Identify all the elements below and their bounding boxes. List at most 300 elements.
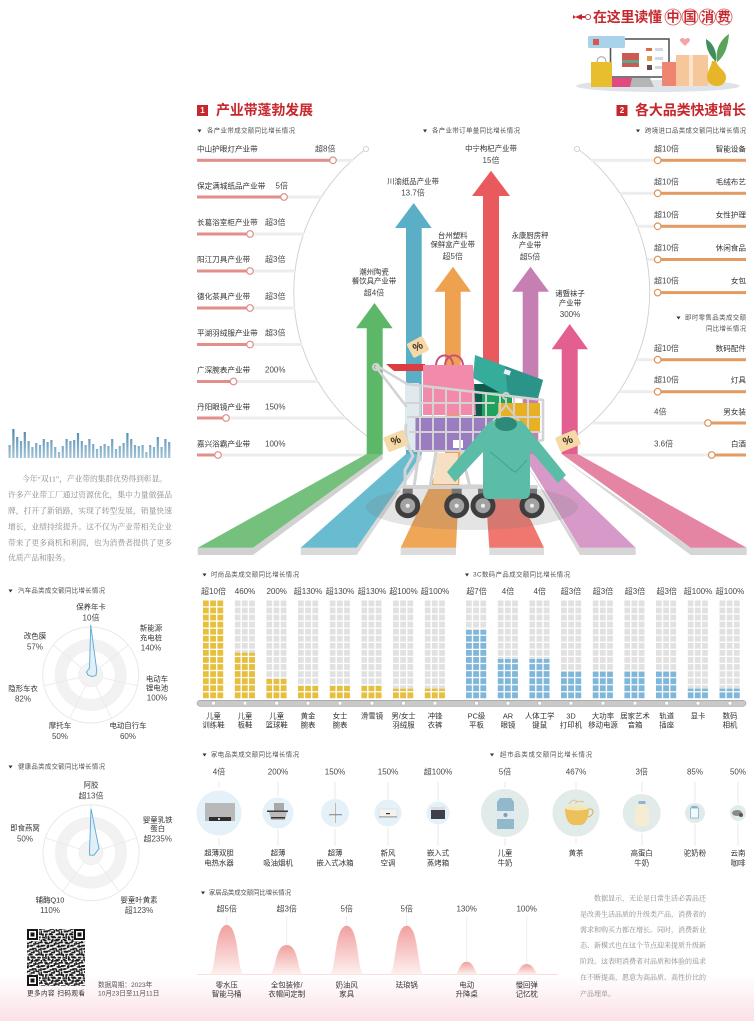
item: 驼奶粉 — [684, 768, 707, 858]
radar labels: 电动车 — [146, 674, 168, 684]
arrow: 永康厨房秤 purple: 永康厨房秤 — [512, 231, 549, 240]
row: 中山护眼灯产业带: 超8倍 — [315, 144, 335, 154]
text block: intro paragraph: 带来了更多商机和利润，也为消费者提供了更多 — [8, 538, 172, 548]
item: 云南咖啡: 咖啡 — [731, 858, 746, 868]
radar labels — [8, 602, 169, 741]
arrow: 中宁枸杞 red — [465, 144, 544, 555]
radar labels: 即食燕窝 — [10, 824, 40, 832]
item: 零水压智能马桶: 超5倍 — [216, 904, 237, 914]
wheels — [395, 489, 544, 518]
text block: intro paragraph: 牌，打开了新销路，实现了转型发展，销量快速 — [8, 506, 172, 516]
column: 大功率移动电源: 超3倍 — [593, 586, 613, 596]
row: 长葛浴室柜产业带 — [197, 217, 304, 237]
sub-heading — [8, 586, 106, 594]
item: 云南咖啡 — [730, 768, 746, 868]
column: 男/女士羽绒服: 超100% — [389, 586, 418, 596]
item: 零水压智能马桶: 智能马桶 — [212, 990, 241, 998]
sub-heading: 超市品类成交额同比增长情况 — [500, 750, 593, 758]
arrow: 川渝纸品 blue: 13.7倍 — [401, 188, 425, 198]
data period note: 10月23日至11月11日 — [98, 990, 159, 998]
row: 休闲食品: 超10倍 — [654, 242, 679, 252]
row: 阳江刀具产业带: 超3倍 — [265, 254, 285, 264]
row: 嘉兴浴霸产业带: 嘉兴浴霸产业带 — [197, 438, 251, 448]
row: 女性护理 — [637, 210, 746, 230]
row: 中山护眼灯产业带 — [197, 144, 353, 164]
row: 数码配件: 超10倍 — [654, 343, 679, 353]
column: 女士腕表: 腕表 — [333, 720, 348, 730]
title text: 消 — [701, 10, 714, 24]
row: 女包: 超10倍 — [654, 276, 679, 286]
radar labels: 婴童叶黄素 — [121, 896, 158, 904]
arrow: 川渝纸品 blue: 川渝纸品产业带 — [387, 177, 439, 186]
column: PC级平板 — [466, 586, 487, 730]
radar labels: 婴童乳铁 — [143, 816, 173, 824]
arrow: 潮州陶瓷 green: 餐饮具产业带 — [352, 276, 397, 286]
sub-heading: instant retail: 即时零售品类成交额 — [685, 312, 747, 322]
cart frame — [373, 364, 543, 487]
radar labels: 10倍 — [83, 612, 99, 622]
item: 云南咖啡: 50% — [730, 768, 746, 776]
row: 男女装: 4倍 — [654, 406, 666, 416]
column: 显卡: 超100% — [684, 586, 712, 596]
price tag: right — [555, 429, 581, 453]
item: 黄茶 — [552, 768, 600, 858]
column: 居家艺术音箱: 居家艺术 — [620, 712, 650, 720]
row: 广深腕表产业带: 广深腕表产业带 — [197, 364, 251, 374]
radar labels: 隐形车衣 — [8, 684, 38, 693]
icon: arrow to target — [573, 14, 591, 20]
sub-heading: 时尚品类成交额同比增长情况 — [211, 570, 300, 578]
column: 儿童训练鞋 — [201, 586, 226, 730]
title text — [593, 9, 732, 25]
column: 女士腕表: 超130% — [326, 586, 354, 596]
row: 休闲食品: 休闲食品 — [716, 242, 746, 252]
item: 嵌入式蒸烤箱: 嵌入式 — [427, 848, 450, 858]
item: 超薄吸油烟机: 超薄 — [271, 848, 286, 858]
item: 高蛋白牛奶: 高蛋白 — [631, 848, 653, 858]
row: 灯具: 超10倍 — [654, 374, 679, 384]
item: 嵌入式蒸烤箱: 超100% — [424, 766, 452, 776]
section heading: 2 各大品类快速增长: 2 — [620, 106, 625, 115]
arrow: 台州塑料 orange: 台州塑料 — [438, 231, 468, 240]
column: 人体工学键鼠: 人体工学 — [525, 712, 554, 720]
item: 全包装修/衣帽间定制: 衣帽间定制 — [268, 990, 305, 998]
item: 嵌入式蒸烤箱 — [424, 766, 452, 868]
goods: teal sweater on hanger — [447, 393, 566, 499]
row: 保定满城纸品产业带: 5倍 — [276, 180, 288, 190]
radar labels: 110% — [40, 906, 60, 915]
row: 平湖羽绒服产业带 — [197, 328, 302, 348]
row: 阳江刀具产业带: 阳江刀具产业带 — [197, 254, 251, 264]
text block: intro paragraph: 今年“双11”，产业带的集群优势得到彰显。 — [22, 474, 167, 484]
arc: big circle frame — [294, 146, 650, 436]
radar labels: 改色膜 — [24, 632, 47, 640]
goods: box stack — [473, 355, 543, 433]
item: 超薄嵌入式冰箱 — [317, 768, 353, 868]
column: 大功率移动电源: 移动电源 — [588, 720, 618, 730]
column: 儿童训练鞋: 超10倍 — [201, 586, 226, 596]
item: 超薄嵌入式冰箱: 嵌入式冰箱 — [317, 858, 353, 868]
bottom pink gradient band — [0, 975, 754, 1021]
radar labels: 锂电池 — [146, 684, 169, 692]
text block: closing paragraph: 阶段。这表明消费者对品质和体验的追求 — [580, 957, 706, 966]
title text: 中 — [666, 10, 680, 24]
arrow: 诸暨袜子 pink: 产业带 — [559, 298, 582, 308]
item: 珐琅锅: 5倍 — [400, 904, 413, 914]
column: 儿童板鞋: 儿童 — [238, 712, 253, 720]
item: 电动升降桌: 130% — [456, 904, 477, 914]
column: 黄金腕表: 腕表 — [301, 720, 316, 730]
column: 冲锋衣裤: 超100% — [421, 586, 449, 596]
column: 居家艺术音箱: 音箱 — [628, 720, 642, 730]
column: 数码相机: 数码 — [723, 712, 737, 720]
column: PC级平板: 平板 — [469, 720, 484, 730]
sub-heading: 家电品类成交额同比增长情况 — [211, 750, 300, 758]
title text: 国 — [683, 10, 697, 24]
section heading: 2 各大品类快速增长: 各大品类快速增长 — [635, 102, 746, 118]
column: 儿童训练鞋: 儿童 — [206, 712, 221, 720]
baseline — [197, 974, 558, 976]
sub-heading — [490, 750, 593, 758]
row: 毛绒布艺 — [620, 176, 746, 197]
sub-heading: instant retail: 同比增长情况 — [706, 324, 747, 332]
item: 电动升降桌 — [454, 904, 480, 998]
item: 新风空调: 新风 — [381, 848, 396, 858]
column: AR眼镜: 眼镜 — [501, 720, 516, 730]
row: 女包 — [654, 276, 746, 296]
radar labels: 超13倍 — [79, 790, 103, 800]
column: 大功率移动电源: 大功率 — [592, 712, 615, 720]
row: 毛绒布艺: 超10倍 — [654, 176, 679, 186]
arrow: 台州塑料 orange: 超5倍 — [442, 251, 463, 261]
text block: closing paragraph: 是改善生活品质的升级类产品，消费者的 — [580, 909, 706, 919]
row: 智能设备: 超10倍 — [654, 144, 679, 154]
text block: closing paragraph — [580, 893, 707, 998]
panel: home appliances — [196, 750, 452, 868]
item: 超薄吸油烟机: 吸油烟机 — [263, 858, 293, 868]
illustration: online shopping scene — [576, 34, 740, 92]
row: 女性护理: 女性护理 — [716, 210, 746, 220]
price tag: right: % — [561, 434, 575, 448]
row: 嘉兴浴霸产业带: 100% — [265, 440, 285, 448]
row: 阳江刀具产业带 — [197, 254, 295, 274]
radar labels: 50% — [17, 834, 33, 844]
column: PC级平板: PC级 — [468, 712, 486, 720]
radar labels: 电动自行车 — [110, 721, 146, 730]
item: 高蛋白牛奶 — [623, 766, 661, 868]
column: AR眼镜 — [498, 586, 519, 730]
column: 儿童板鞋: 460% — [235, 587, 255, 596]
row: 白酒: 白酒 — [731, 438, 746, 448]
item: 全包装修/衣帽间定制 — [268, 904, 305, 998]
radar labels: 新能源 — [140, 624, 163, 632]
panel: category growth bars — [580, 126, 747, 458]
row: 数码配件 — [637, 343, 746, 363]
text block: closing paragraph: 在不断提高，愿意为高品质、高性价比的 — [580, 973, 706, 983]
row: 男女装: 男女装 — [723, 406, 746, 416]
row: 灯具 — [620, 374, 746, 395]
column: 冲锋衣裤: 衣裤 — [428, 720, 443, 730]
item: 奶油风家具: 5倍 — [340, 904, 353, 914]
row: 数码配件: 数码配件 — [716, 343, 746, 353]
text block: intro paragraph: 优质产品和服务。 — [8, 552, 70, 562]
QR code — [26, 928, 86, 986]
section heading: 1 产业带蓬勃发展: 产业带蓬勃发展 — [216, 102, 313, 118]
item: 高蛋白牛奶: 牛奶 — [634, 858, 649, 868]
item: 零水压智能马桶: 零水压 — [216, 980, 238, 990]
item: 奶油风家具: 家具 — [339, 990, 355, 998]
sub-heading: 健康品类成交额同比增长情况 — [18, 762, 106, 770]
row: 丹阳眼镜产业带: 丹阳眼镜产业带 — [197, 402, 251, 412]
panel: 3C digital waffle chart — [465, 570, 744, 730]
column: 显卡: 显卡 — [691, 712, 705, 720]
item: 奶油风家具 — [329, 904, 365, 998]
column: 人体工学键鼠: 4倍 — [533, 586, 546, 596]
arrow: 诸暨袜子 pink — [552, 289, 747, 555]
arrow: 诸暨袜子 pink: 诸暨袜子 — [555, 289, 585, 298]
row: 德化茶具产业带: 超3倍 — [265, 291, 285, 301]
column: 轨道插座: 轨道 — [659, 712, 675, 720]
arrow: 中宁枸杞 red: 15倍 — [483, 155, 499, 165]
item: 电动升降桌: 电动 — [459, 980, 474, 990]
column: 人体工学键鼠: 键鼠 — [532, 720, 548, 730]
row: 平湖羽绒服产业带: 超3倍 — [265, 328, 285, 338]
row: 德化茶具产业带: 德化茶具产业带 — [197, 291, 251, 301]
row: 灯具: 灯具 — [731, 374, 746, 384]
title text: 在这里读懂 — [593, 9, 662, 25]
column: AR眼镜: 4倍 — [502, 586, 514, 596]
sub-heading: 各产业带订单量同比增长情况 — [432, 126, 521, 134]
radar labels: 50% — [52, 732, 68, 741]
text block: closing paragraph: 态、新模式也在这个节点迎来提质升级新 — [580, 941, 706, 950]
sub-heading: 家居品类成交额同比增长情况 — [209, 888, 292, 896]
radar labels: 保养年卡 — [76, 602, 106, 612]
item: 超薄双胆电热水器: 电热水器 — [204, 858, 234, 868]
sub-heading: 3C数码产品成交额同比增长情况 — [473, 570, 571, 578]
column: 女士腕表: 女士 — [333, 712, 348, 720]
item: 慢回弹记忆枕 — [514, 904, 540, 998]
sub-heading — [8, 762, 106, 770]
price tag: top — [406, 336, 430, 358]
item: 驼奶粉: 驼奶粉 — [684, 848, 707, 858]
item: 超薄吸油烟机: 200% — [268, 768, 288, 776]
column: 轨道插座: 插座 — [659, 720, 675, 730]
sub-heading: instant retail — [676, 312, 747, 332]
radar labels: 60% — [120, 732, 136, 741]
radar labels — [10, 780, 173, 915]
row: 长葛浴室柜产业带: 超3倍 — [265, 217, 285, 227]
column: 人体工学键鼠 — [525, 586, 554, 730]
row: 女包: 女包 — [731, 276, 746, 286]
column: 数码相机: 超100% — [716, 586, 744, 596]
radar labels: 57% — [27, 642, 43, 652]
row: 女性护理: 超10倍 — [654, 210, 679, 220]
text block: intro paragraph: 增长，业绩持续提升。这不仅为产业带相关企业 — [8, 522, 172, 532]
text block: closing paragraph: 数据显示，无论是日常生活必需品还 — [594, 893, 707, 903]
column: 3D打印机: 打印机 — [560, 720, 583, 730]
column: 大功率移动电源 — [588, 586, 618, 730]
column: 儿童篮球鞋 — [266, 587, 288, 730]
radar labels: 辅酶Q10 — [36, 896, 64, 904]
column: 3D打印机: 超3倍 — [561, 586, 581, 596]
mini bar decoration — [8, 429, 170, 458]
column: 滑雪镜 — [358, 586, 386, 720]
arrow: 潮州陶瓷 green — [198, 268, 397, 555]
item: 超薄双胆电热水器 — [196, 766, 242, 868]
row: 白酒: 3.6倍 — [654, 438, 673, 448]
item: 儿童牛奶 — [481, 766, 529, 868]
column: 黄金腕表: 黄金 — [301, 712, 316, 720]
sub-heading: cross-border: 跨境进口品类成交额同比增长情况 — [645, 126, 747, 134]
row: 保定满城纸品产业带: 保定满城纸品产业带 — [197, 180, 266, 190]
column: 男/女士羽绒服 — [389, 586, 418, 730]
row: 广深腕表产业带 — [197, 364, 318, 385]
column: 居家艺术音箱: 超3倍 — [625, 586, 645, 596]
arrow: 台州塑料 orange: 保鲜盒产业带 — [431, 240, 475, 249]
row: 中山护眼灯产业带: 中山护眼灯产业带 — [197, 144, 258, 154]
panel: industrial belt GMV growth — [197, 126, 367, 458]
row: 休闲食品 — [647, 242, 746, 263]
column: 女士腕表 — [326, 586, 354, 730]
arrow: 永康厨房秤 purple: 超5倍 — [520, 252, 540, 262]
item: 超薄双胆电热水器: 超薄双胆 — [204, 848, 234, 858]
goods: pink shopping bag — [423, 356, 476, 415]
column: 数码相机 — [716, 586, 744, 730]
column: 儿童篮球鞋: 篮球鞋 — [266, 720, 288, 730]
column: 3D打印机: 3D — [566, 712, 576, 720]
column: 滑雪镜: 超130% — [358, 586, 386, 596]
column: 滑雪镜: 滑雪镜 — [361, 712, 384, 720]
radar labels: 摩托车 — [49, 721, 71, 730]
column: 黄金腕表 — [294, 586, 322, 730]
row: 智能设备 — [591, 144, 746, 164]
row: 毛绒布艺: 毛绒布艺 — [716, 176, 746, 186]
row: 白酒 — [580, 438, 746, 458]
item: 慢回弹记忆枕: 记忆枕 — [516, 990, 538, 998]
column: 男/女士羽绒服: 男/女士 — [391, 712, 416, 720]
column: PC级平板: 超7倍 — [466, 586, 487, 596]
item: 新风空调: 空调 — [381, 858, 395, 868]
column: 黄金腕表: 超130% — [294, 586, 322, 596]
item: 驼奶粉: 85% — [687, 768, 703, 776]
column: 儿童篮球鞋: 儿童 — [269, 712, 285, 720]
row: 德化茶具产业带 — [197, 291, 295, 311]
price tag: top: % — [411, 339, 425, 355]
item: 全包装修/衣帽间定制: 全包装修/ — [271, 980, 303, 990]
column: 3D打印机 — [560, 586, 583, 730]
row: 智能设备: 智能设备 — [716, 144, 746, 154]
item: 珐琅锅: 珐琅锅 — [396, 980, 418, 990]
section heading: 1 产业带蓬勃发展: 1 — [200, 106, 205, 115]
column: 儿童板鞋: 板鞋 — [238, 720, 253, 730]
column: 冲锋衣裤: 冲锋 — [428, 712, 443, 720]
column: 轨道插座: 超3倍 — [656, 586, 677, 596]
item: 嵌入式蒸烤箱: 蒸烤箱 — [427, 858, 449, 868]
column: 冲锋衣裤 — [421, 586, 449, 730]
illustration: shopping cart with goods — [366, 336, 581, 530]
QR caption: 更多内容 扫码观看 — [27, 988, 85, 998]
radar plot — [43, 625, 139, 723]
column: 儿童板鞋 — [235, 587, 256, 730]
arrow: 永康厨房秤 purple — [512, 231, 636, 555]
item: 儿童牛奶: 儿童 — [498, 848, 513, 858]
arrow: 川渝纸品 blue — [301, 177, 439, 555]
arrow: 潮州陶瓷 green: 潮州陶瓷 — [359, 268, 389, 276]
column: 儿童篮球鞋: 200% — [266, 587, 287, 596]
radar labels: 超123% — [125, 905, 153, 915]
column: 居家艺术音箱 — [620, 586, 650, 730]
radar labels: 超235% — [143, 834, 172, 844]
item: 超薄吸油烟机 — [262, 768, 294, 868]
item: 新风空调 — [374, 768, 402, 868]
item: 奶油风家具: 奶油风 — [336, 980, 358, 990]
data period note — [98, 980, 159, 998]
main title — [573, 9, 732, 25]
panel: order-volume growth arrows — [198, 126, 747, 555]
item: 儿童牛奶: 5倍 — [499, 766, 511, 776]
panel: supermarket — [481, 750, 746, 868]
arrow: 诸暨袜子 pink: 300% — [560, 310, 580, 319]
sub-heading: 各产业带成交额同比增长情况 — [207, 126, 296, 134]
item: 儿童牛奶: 牛奶 — [498, 858, 512, 868]
item: 超薄嵌入式冰箱: 150% — [325, 768, 345, 776]
item: 慢回弹记忆枕: 慢回弹 — [516, 980, 538, 990]
row: 广深腕表产业带: 200% — [265, 366, 285, 374]
item: 珐琅锅 — [389, 904, 425, 990]
rail — [197, 700, 746, 706]
arrow: 潮州陶瓷 green: 超4倍 — [364, 288, 384, 298]
column: 儿童训练鞋: 训练鞋 — [202, 720, 225, 730]
row: 保定满城纸品产业带 — [197, 180, 322, 200]
price tag: left: % — [389, 434, 403, 448]
data period note: 数据周期：2023年 — [98, 980, 153, 989]
sub-heading — [198, 126, 296, 134]
radar plot — [43, 805, 139, 901]
item: 全包装修/衣帽间定制: 超3倍 — [276, 904, 297, 914]
item: 新风空调: 150% — [378, 768, 398, 776]
item: 黄茶: 467% — [566, 768, 586, 776]
panel: fashion waffle chart — [197, 570, 746, 730]
column: 数码相机: 相机 — [723, 720, 738, 730]
radar chart: auto — [8, 586, 169, 741]
radar labels: 蛋白 — [150, 824, 165, 833]
text block: closing paragraph: 产品埋单。 — [580, 989, 615, 998]
item: 电动升降桌: 升降桌 — [456, 990, 478, 998]
sub-heading: 汽车品类成交额同比增长情况 — [18, 586, 106, 594]
radar chart: health — [8, 762, 173, 915]
radar labels: 100% — [147, 694, 167, 702]
row: 男女装 — [593, 406, 746, 426]
arrow: 永康厨房秤 purple: 产业带 — [519, 240, 542, 250]
item: 黄茶: 黄茶 — [569, 848, 584, 858]
row: 长葛浴室柜产业带: 长葛浴室柜产业带 — [197, 217, 258, 227]
text block: intro paragraph — [8, 474, 172, 562]
item: 超薄双胆电热水器: 4倍 — [213, 766, 225, 776]
row: 嘉兴浴霸产业带 — [197, 438, 367, 458]
text block: closing paragraph: 需求和购买力都在增长。同时，消费新业 — [580, 925, 706, 935]
radar labels: 阿胶 — [84, 780, 99, 790]
column: 男/女士羽绒服: 羽绒服 — [392, 720, 415, 730]
title text: 费 — [717, 10, 731, 24]
arrow: 台州塑料 orange — [401, 231, 475, 555]
text block: intro paragraph: 许多产业带工厂通过资源优化，集中力量做强品 — [8, 490, 172, 500]
item: 慢回弹记忆枕: 100% — [516, 904, 537, 914]
item: 零水压智能马桶 — [209, 904, 245, 998]
goods: purple box — [416, 417, 494, 450]
row: 平湖羽绒服产业带: 平湖羽绒服产业带 — [197, 328, 258, 338]
row: 丹阳眼镜产业带 — [197, 402, 346, 421]
item: 云南咖啡: 云南 — [731, 848, 745, 858]
